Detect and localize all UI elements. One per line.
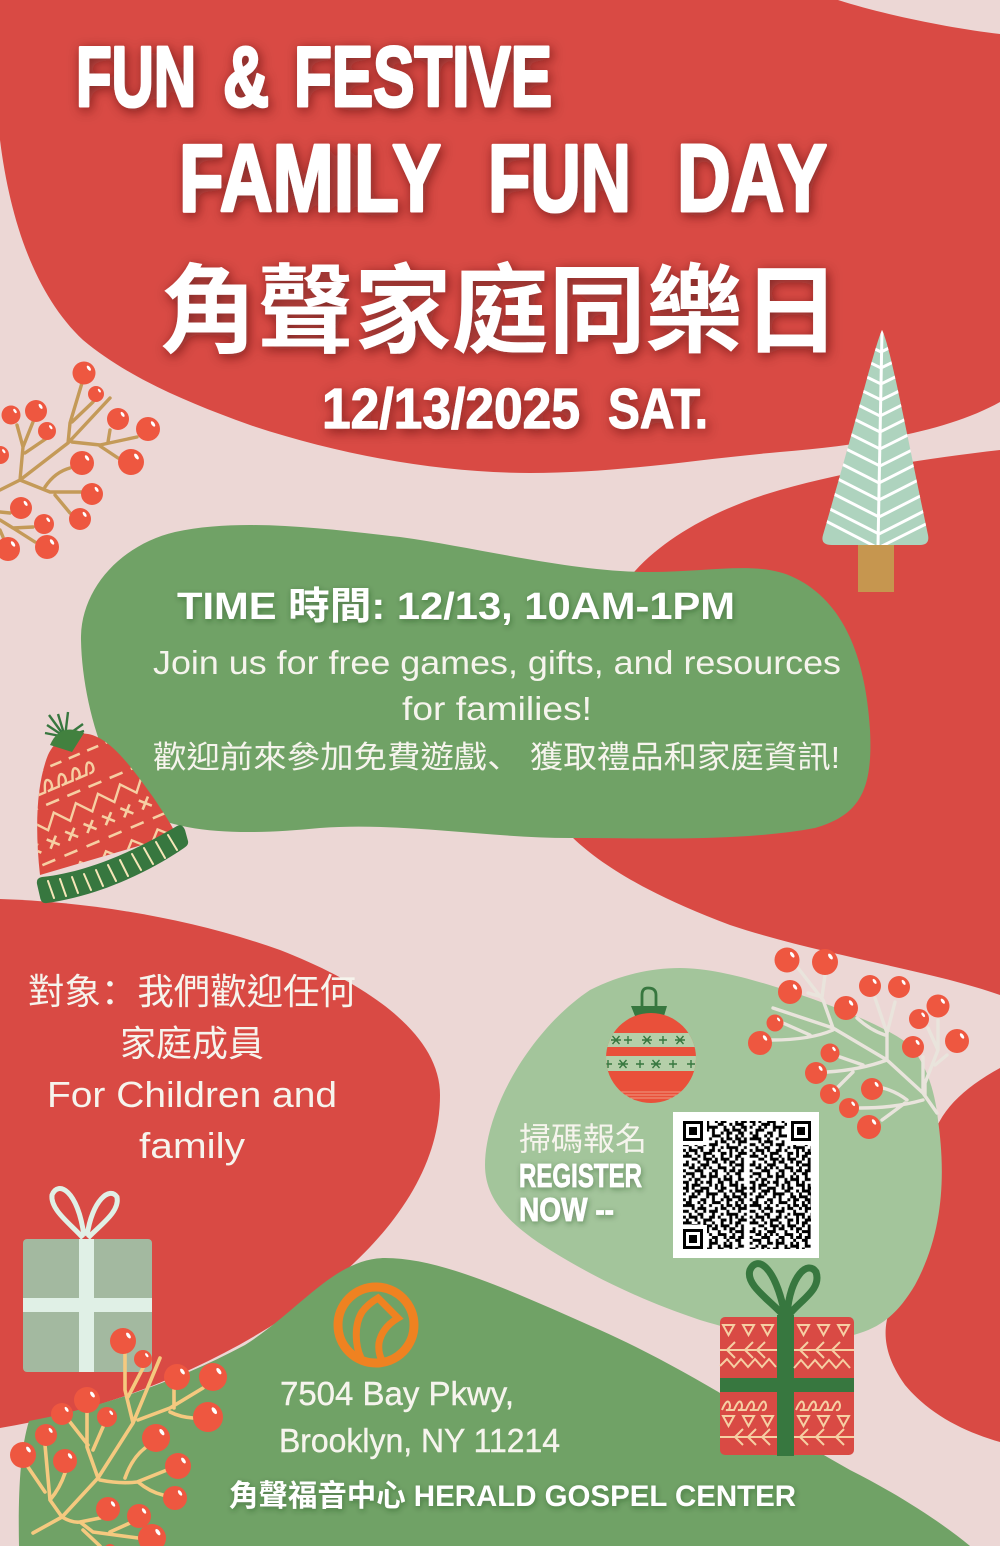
address — [279, 1375, 560, 1459]
title: Family Fun Day — [179, 125, 827, 232]
address: Brooklyn, NY 11214 — [279, 1422, 560, 1459]
logo: Herald Gospel Center — [338, 1287, 414, 1365]
title: Fun & Festive: FUN — [76, 30, 196, 125]
icon: white berry branch — [748, 948, 969, 1139]
address: 7504 Bay Pkwy, — [280, 1375, 514, 1412]
info: description: 歡迎前來參加免費遊戲 、 獲取禮品和家庭資訊! — [153, 732, 840, 777]
icon: ornament — [600, 988, 700, 1103]
icon: berry branch top left — [0, 362, 160, 561]
audience text: family — [139, 1125, 245, 1166]
blob: bottom green — [19, 1258, 970, 1546]
register text: 掃碼報名 — [519, 1121, 647, 1157]
info: time heading: TIME 時間: 12/13, 10AM-1PM — [177, 586, 735, 628]
date: 12/13/2025 — [322, 377, 580, 441]
title: Fun & Festive — [76, 30, 552, 125]
audience text — [28, 963, 356, 1166]
organisation name: 角聲福音中心 HERALD GOSPEL CENTER — [229, 1480, 796, 1513]
icon: pale gift box — [23, 1189, 152, 1372]
audience text: 家庭成員 — [120, 1023, 264, 1064]
blob: left red — [0, 899, 440, 1428]
blob: lower right red — [886, 1068, 1000, 1442]
icon: christmas tree — [822, 330, 928, 592]
title: Family Fun Day: FUN — [488, 125, 631, 232]
title: Fun & Festive: & — [223, 30, 269, 125]
blob: center green panel — [81, 525, 870, 839]
register text: NOW -- — [519, 1191, 614, 1228]
info: description: Join us for free games, gifts, and resources — [153, 644, 841, 681]
register text — [519, 1121, 647, 1228]
blob: right middle red — [570, 450, 1000, 995]
audience text: 對象：我們歡迎任何 — [28, 963, 356, 1015]
register text: REGISTER — [519, 1157, 642, 1194]
blob: light green register panel — [485, 968, 942, 1341]
blob: top red — [0, 0, 1000, 473]
title: Family Fun Day: DAY — [677, 125, 827, 232]
icon: orange berry branch — [10, 1328, 227, 1546]
info: description — [153, 644, 841, 777]
title: Chinese: 角聲家庭同樂日 — [160, 257, 840, 366]
icon: red gift box — [720, 1264, 854, 1456]
title: Fun & Festive: FESTIVE — [294, 30, 552, 125]
icon: knit hat — [36, 712, 188, 904]
title: Family Fun Day: FAMILY — [179, 125, 441, 232]
date: SAT. — [608, 377, 708, 441]
audience text: For Children and — [47, 1074, 337, 1115]
QR code — [673, 1112, 819, 1258]
info: description: for families! — [402, 690, 592, 727]
